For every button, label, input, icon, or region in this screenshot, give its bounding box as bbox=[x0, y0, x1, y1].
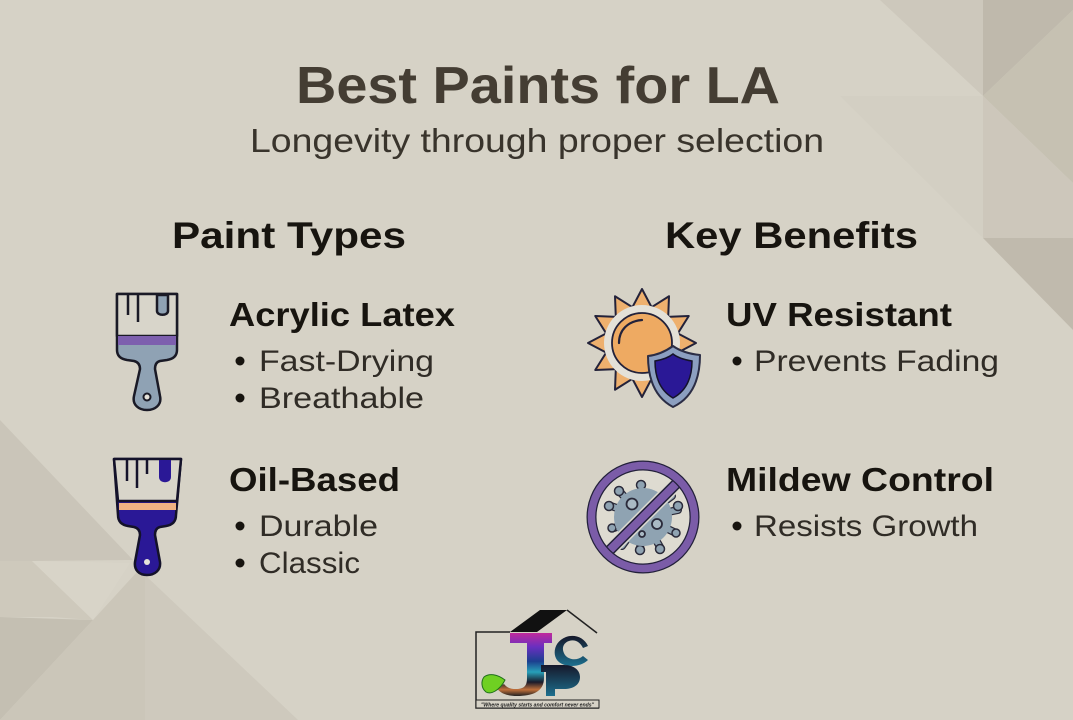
text block: Mildew Control: Mildew Control bbox=[726, 461, 994, 498]
text block: Mildew Control: Resists Growth bbox=[754, 510, 978, 543]
text block: Oil-Based: Durable bbox=[259, 510, 378, 543]
heading: Key Benefits: Key Benefits bbox=[665, 215, 918, 256]
text block: Mildew Control bbox=[726, 461, 994, 543]
text block: Acrylic Latex: Acrylic Latex bbox=[229, 296, 456, 333]
logo bbox=[476, 610, 599, 708]
title: Best Paints for LA bbox=[296, 57, 780, 115]
logo: "Where quality starts and comfort never ends" bbox=[481, 702, 594, 708]
text block: Acrylic Latex bbox=[229, 296, 456, 415]
heading: Paint Types: Paint Types bbox=[172, 215, 406, 256]
icon: sun with shield bbox=[588, 289, 700, 407]
icon: mildew prohibited bbox=[592, 466, 694, 568]
text block: Oil-Based: Oil-Based bbox=[229, 461, 400, 498]
text block: Oil-Based bbox=[229, 461, 400, 580]
text block: UV Resistant bbox=[726, 296, 999, 378]
subtitle: Longevity through proper selection bbox=[250, 122, 824, 159]
text block: Oil-Based: Classic bbox=[259, 547, 360, 580]
text block: Acrylic Latex: Breathable bbox=[259, 382, 424, 415]
icon: acrylic latex brush bbox=[117, 294, 177, 410]
text block: Acrylic Latex: Fast-Drying bbox=[259, 345, 434, 378]
text block: UV Resistant: UV Resistant bbox=[726, 296, 952, 333]
text block: UV Resistant: Prevents Fading bbox=[754, 345, 999, 378]
icon: oil-based brush bbox=[114, 459, 181, 575]
